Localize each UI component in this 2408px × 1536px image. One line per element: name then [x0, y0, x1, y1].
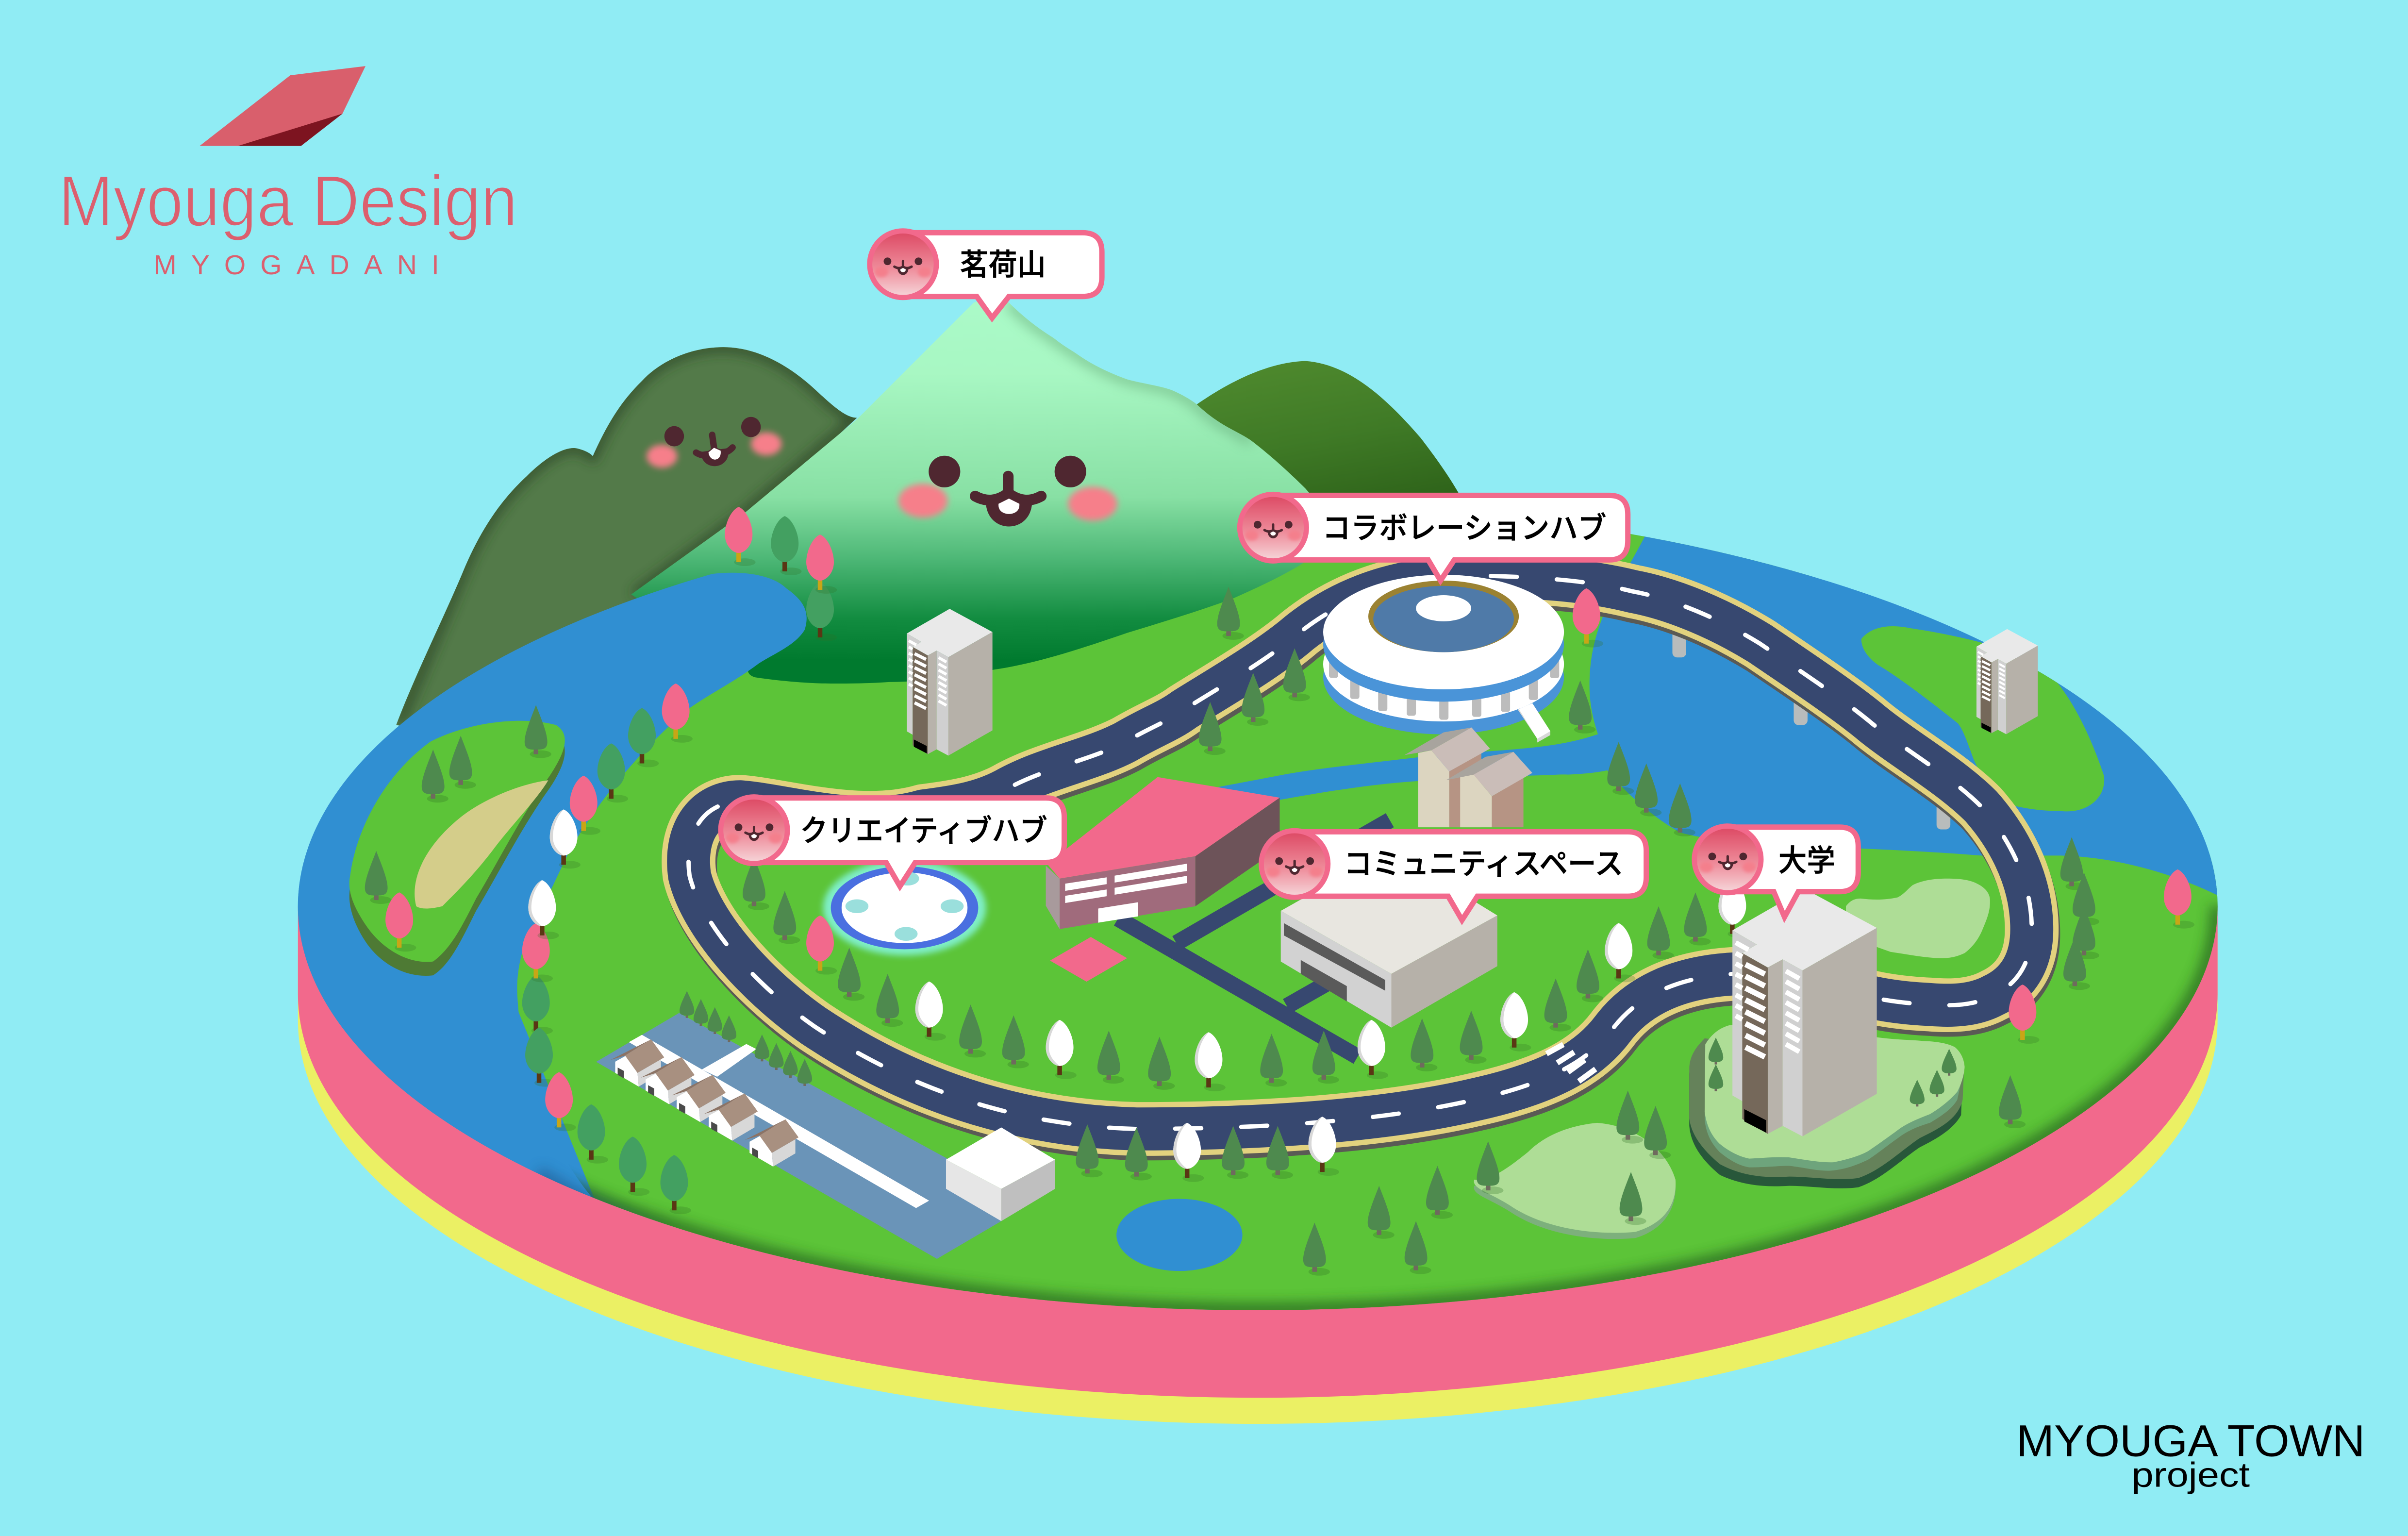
main land	[517, 534, 2218, 1310]
label: コミュニティスペース	[1262, 831, 1646, 920]
pond	[1116, 1199, 1243, 1271]
water surface	[298, 502, 2218, 1310]
silo buildings	[1404, 727, 1532, 827]
label: クリエイティブハブ: クリエイティブハブ	[800, 814, 1047, 848]
trees: small conifers near houses	[680, 991, 812, 1086]
trees: pink	[385, 507, 2194, 1131]
lake and river on the right	[1217, 536, 2217, 895]
trees: white	[528, 809, 1749, 1182]
bridge pillars	[1672, 627, 1950, 830]
island disc base layers	[298, 906, 2218, 1424]
left river island	[349, 721, 565, 976]
road	[689, 576, 2033, 1134]
trees: green	[522, 516, 837, 1214]
label: コラボレーションハブ	[1240, 494, 1628, 581]
dark paths	[1118, 820, 1390, 1057]
label: 茗荷山: 茗荷山	[960, 248, 1046, 282]
mountain: 茗荷山	[631, 297, 1329, 684]
back right hill	[1182, 361, 1462, 530]
river on the left	[277, 573, 807, 1236]
label: 茗荷山	[870, 231, 1102, 318]
pink roofed building	[1046, 777, 1279, 929]
small conifers on university island	[1709, 1037, 1957, 1106]
logo: Myouga Design: Myouga Design	[58, 160, 517, 241]
crosswalk	[1546, 1045, 1595, 1081]
university island base	[1689, 1025, 1965, 1188]
community space building	[1281, 850, 1497, 1028]
land rim shade on river	[534, 1165, 655, 1220]
project title: MYOUGA TOWN	[2016, 1416, 2365, 1466]
left hill with face	[396, 347, 857, 737]
logo: Myouga Design	[58, 66, 517, 281]
label: クリエイティブハブ	[721, 797, 1064, 886]
peninsula	[1861, 626, 2104, 811]
label: 大学: 大学	[1778, 844, 1835, 878]
logo: Myouga Design: MYOGADANI	[153, 250, 439, 281]
tower near mountain	[907, 609, 993, 755]
project title: project	[2131, 1456, 2250, 1495]
trees: conifers	[365, 587, 2099, 1276]
label: コラボレーションハブ: コラボレーションハブ	[1322, 512, 1606, 545]
houses	[610, 1039, 798, 1167]
tower on peninsula	[1976, 629, 2038, 734]
light green patches	[1474, 879, 1990, 1239]
land rim shade	[537, 906, 2218, 1310]
pink plaza	[1050, 937, 1127, 982]
label: コミュニティスペース: コミュニティスペース	[1344, 847, 1623, 881]
project title	[2016, 1416, 2365, 1495]
collaboration hub rotunda	[1323, 575, 1564, 742]
white warehouse	[946, 1127, 1055, 1221]
housing estate lot	[596, 1013, 1001, 1259]
label: 大学	[1694, 826, 1858, 917]
creative hub	[823, 860, 986, 955]
university tower	[1732, 889, 1877, 1136]
